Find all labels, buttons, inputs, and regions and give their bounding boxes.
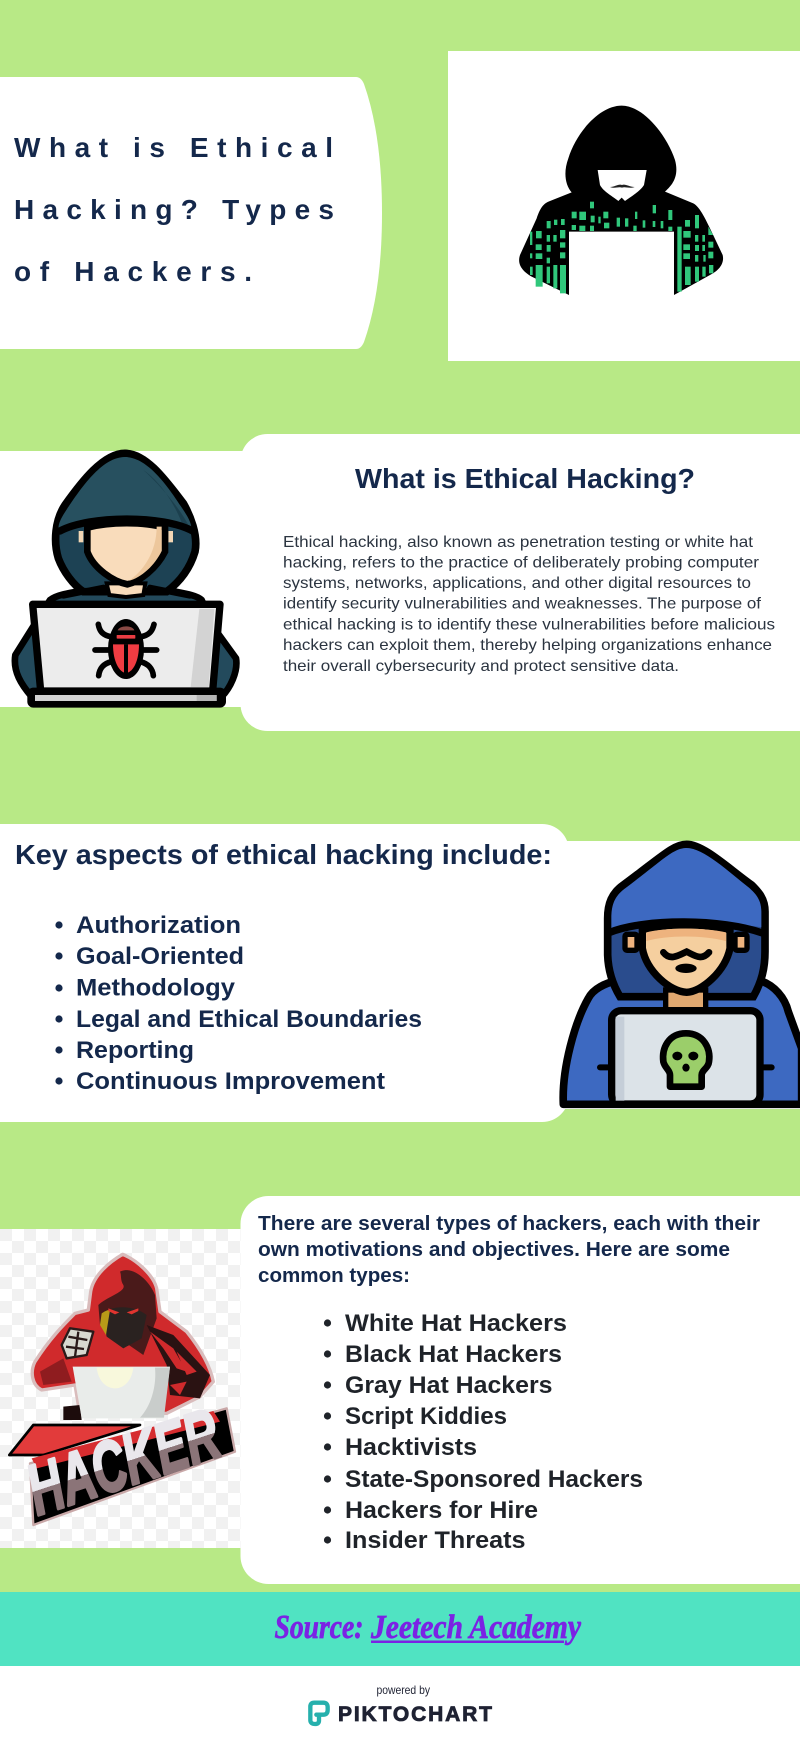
heading: Key aspects of ethical hacking include:: [15, 839, 552, 870]
title: [14, 132, 334, 287]
text block: definition: ethical hacking is to identify these vulnerabilities before malicious: [283, 616, 775, 634]
panel: hero image: [448, 51, 800, 361]
bullet list: hacker types: Hacktivists: [345, 1434, 477, 1461]
icon: skull: [663, 1033, 709, 1087]
bullet list: key aspects: Legal and Ethical Boundaries: [76, 1006, 422, 1033]
footer band: [0, 1592, 800, 1666]
text block: definition: hackers can exploit them, thereby helping organizations enhance: [283, 637, 772, 654]
text block: definition: systems, networks, applications, and other digital resources to: [283, 575, 751, 592]
bullet list: hacker types: Insider Threats: [345, 1527, 526, 1554]
bullet list: key aspects: Authorization: [76, 912, 241, 939]
bullet list: key aspects: Reporting: [76, 1037, 194, 1064]
icon: teal hacker with bug laptop: [15, 453, 236, 708]
icon: piktochart logo mark: [310, 1703, 328, 1724]
text block: intro: own motivations and objectives. Here are some: [258, 1239, 730, 1261]
bullet list: key aspects: Methodology: [76, 974, 236, 1002]
text block: intro: There are several types of hackers, each with their: [258, 1213, 760, 1235]
text block: intro: [258, 1213, 760, 1287]
title: Hacking? Types: [14, 194, 334, 225]
wordmark: PIKTOCHART: [338, 1703, 492, 1726]
text block: definition: Ethical hacking, also known as penetration testing or white hat: [283, 534, 754, 551]
icon: red hooded hacker logo: [9, 1254, 235, 1531]
icon: blue hacker with skull laptop: [563, 844, 800, 1104]
source credit: [274, 1609, 582, 1646]
bullet list: hacker types: Script Kiddies: [345, 1403, 507, 1430]
title: What is Ethical: [14, 132, 333, 163]
branding: powered by piktochart: [0, 1666, 800, 1746]
source credit: Source:: [274, 1609, 364, 1646]
heading: What is Ethical Hacking?: [355, 463, 695, 494]
bullet list: key aspects: Goal-Oriented: [76, 943, 244, 970]
bullet list: hacker types: Gray Hat Hackers: [345, 1372, 552, 1399]
powered by label: powered by: [376, 1683, 430, 1697]
panel: title: [0, 77, 382, 349]
text block: definition: [283, 534, 775, 675]
bullet list: hacker types: White Hat Hackers: [345, 1310, 567, 1337]
bullet list: hacker types: Black Hat Hackers: [345, 1341, 562, 1368]
icon: black hooded hacker with green code: [519, 106, 723, 295]
panel: what is ethical hacking: [0, 434, 800, 731]
bullet list: hacker types: [324, 1310, 643, 1554]
text block: intro: common types:: [258, 1265, 410, 1287]
source credit: Jeetech Academy: [370, 1609, 582, 1646]
panel: key aspects: [0, 824, 800, 1122]
bullet list: key aspects: Continuous Improvement: [76, 1068, 385, 1095]
bullet list: hacker types: State-Sponsored Hackers: [345, 1466, 643, 1493]
text block: definition: their overall cybersecurity and protect sensitive data.: [283, 658, 679, 675]
icon: bug: [95, 619, 157, 679]
logo lettering: HACKER: [18, 1394, 229, 1531]
text block: definition: hacking, refers to the practice of deliberately probing computer: [283, 554, 760, 572]
bullet list: key aspects: [55, 912, 422, 1095]
bullet list: hacker types: Hackers for Hire: [345, 1497, 538, 1524]
title: of Hackers.: [14, 256, 252, 287]
text block: definition: identify security vulnerabilities and weaknesses. The purpose of: [283, 596, 762, 612]
panel: types of hackers: [0, 1196, 800, 1584]
